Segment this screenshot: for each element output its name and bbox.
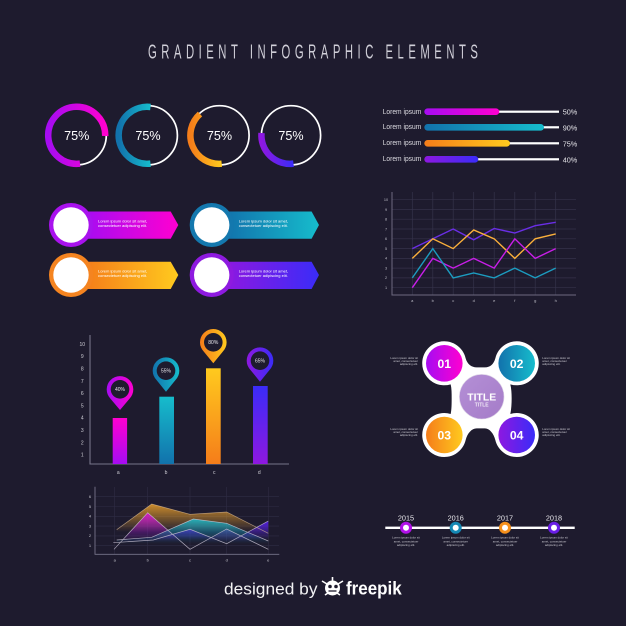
icon: freepik mascot <box>322 577 343 596</box>
bar c with 80% pin <box>200 329 227 476</box>
progress bar: 40%: Lorem ipsum <box>383 156 421 163</box>
bar chart with pins <box>80 329 289 476</box>
area: teal <box>117 519 268 549</box>
node 03 <box>426 417 463 453</box>
ribbon: magenta: Lorem ipsum dolor sit amet, <box>98 219 147 224</box>
ribbon: purple <box>190 253 319 297</box>
y axis labels: 1 <box>385 286 387 290</box>
milestone 2017 <box>491 514 519 547</box>
y axis labels: 10 <box>80 342 85 348</box>
ribbon: orange: Lorem ipsum dolor sit amet, <box>98 269 147 274</box>
bar b with 55% pin <box>153 357 179 476</box>
progress bar: 40% <box>383 155 578 164</box>
bar c with 80% pin: 80% <box>208 340 219 346</box>
ribbon: orange: consectetuer adipiscing elit. <box>98 273 147 278</box>
donut: magenta 75%: 75% <box>64 129 89 143</box>
y axis labels: 2 <box>385 276 387 280</box>
area: purple <box>113 521 268 549</box>
line: magenta <box>412 239 556 288</box>
caption: 01: amet, consectetuer <box>393 359 418 363</box>
y axis labels <box>384 198 388 290</box>
x axis labels: b <box>432 298 435 303</box>
milestone 2017: 2017 <box>497 514 513 522</box>
white blob connector <box>422 341 539 457</box>
area chart <box>89 487 279 562</box>
caption: 02: amet, consectetuer <box>542 359 567 363</box>
milestone 2016: amet, consectetuer <box>443 539 468 543</box>
caption: 02: Lorem ipsum dolor sit <box>542 356 570 360</box>
progress bar: 90%: 90% <box>563 123 578 132</box>
centre circle: TITLE <box>475 403 489 409</box>
x axis labels: d <box>473 298 475 303</box>
x axis labels: a <box>114 558 117 562</box>
node 04: 04 <box>510 428 524 442</box>
y axis labels: 2 <box>81 440 84 446</box>
caption: 04: Lorem ipsum dolor sit <box>542 427 570 431</box>
milestone 2016 <box>442 514 470 547</box>
y axis labels: 3 <box>81 428 84 434</box>
panel: horizontal progress bars <box>383 108 578 164</box>
y axis labels: 9 <box>385 208 387 212</box>
panel: numbered cluster diagram <box>390 341 570 457</box>
bar c with 80% pin: c <box>213 470 216 476</box>
progress bar: 90%: Lorem ipsum <box>383 124 421 131</box>
ribbon: magenta: consectetuer adipiscing elit. <box>98 223 147 228</box>
x axis labels <box>114 558 270 562</box>
bar d with 65% pin <box>247 347 273 476</box>
node 04 <box>498 417 535 453</box>
progress bar: 40%: 40% <box>563 155 578 164</box>
panel: ribbon labels <box>49 203 319 297</box>
milestone 2015 <box>392 514 420 547</box>
ribbon: teal: consectetuer adipiscing elit. <box>239 223 288 228</box>
ribbon: teal: Lorem ipsum dolor sit amet, <box>239 219 288 224</box>
line chart <box>384 192 576 303</box>
area: orange <box>117 504 268 548</box>
x axis labels: e <box>493 298 496 303</box>
milestone 2017: Lorem ipsum dolor sit <box>491 536 519 540</box>
ribbon: purple: Lorem ipsum dolor sit amet, <box>239 269 288 274</box>
y axis labels: 5 <box>81 403 84 409</box>
y axis labels: 6 <box>385 237 387 241</box>
donut: orange 75%: 75% <box>207 129 232 143</box>
donut: purple 75% <box>261 106 321 165</box>
node 01: 01 <box>438 357 451 371</box>
caption: 04: adipiscing elit. <box>542 433 561 437</box>
progress bar: 75% <box>383 139 578 148</box>
progress bar: 75%: Lorem ipsum <box>383 140 421 147</box>
bar b with 55% pin: b <box>165 470 168 476</box>
progress bar: 50%: Lorem ipsum <box>383 109 421 116</box>
milestone 2015: amet, consectetuer <box>394 539 418 543</box>
caption: 01: adipiscing elit. <box>400 362 418 366</box>
y axis labels: 3 <box>385 266 387 270</box>
donut: purple 75%: 75% <box>278 129 304 143</box>
y axis labels <box>89 494 92 548</box>
caption: 01: Lorem ipsum dolor sit <box>390 356 418 360</box>
node 02 <box>498 345 535 382</box>
progress bar: 75%: 75% <box>563 139 578 148</box>
x axis labels: c <box>189 558 191 562</box>
x axis labels: b <box>147 558 150 562</box>
progress bar: 50%: 50% <box>563 108 578 117</box>
milestone 2018: amet, consectetuer <box>542 539 566 543</box>
x axis labels: h <box>555 298 557 303</box>
y axis labels: 4 <box>81 416 84 422</box>
caption: 02: adipiscing elit. <box>542 362 561 366</box>
line: teal <box>412 249 556 278</box>
y axis labels: 1 <box>81 453 84 459</box>
ribbon: orange <box>49 253 178 297</box>
ribbon: magenta <box>49 203 178 247</box>
bar d with 65% pin: 65% <box>255 358 266 364</box>
ribbon: teal <box>190 203 319 247</box>
y axis labels: 6 <box>89 494 92 499</box>
y axis labels: 10 <box>384 198 388 202</box>
title: GRADIENT INFOGRAPHIC ELEMENTS <box>148 40 478 63</box>
caption: 04: amet, consectetuer <box>542 430 567 434</box>
y axis labels: 1 <box>89 543 92 548</box>
line: purple <box>412 222 556 249</box>
y axis labels: 8 <box>385 218 387 222</box>
y axis labels: 9 <box>81 354 84 360</box>
donut: teal 75%: 75% <box>135 129 161 143</box>
donut: magenta 75% <box>47 106 106 165</box>
area: magenta <box>114 513 268 549</box>
milestone 2016: 2016 <box>448 514 464 522</box>
bar a with 40% pin: 40% <box>115 387 126 393</box>
footer: designed by freepik: designed by <box>224 580 318 598</box>
progress bar: 50% <box>383 108 578 117</box>
timeline <box>385 514 575 547</box>
caption: 03: amet, consectetuer <box>393 430 418 434</box>
node 01 <box>426 345 463 382</box>
progress bar: 90% <box>383 123 578 132</box>
milestone 2015: Lorem ipsum dolor sit <box>392 536 420 540</box>
y axis labels: 7 <box>81 379 84 385</box>
bar a with 40% pin: a <box>117 470 120 476</box>
y axis labels: 2 <box>89 533 92 538</box>
ribbon: purple: consectetuer adipiscing elit. <box>239 273 288 278</box>
node 02: 02 <box>510 357 524 371</box>
bar a with 40% pin <box>107 376 133 476</box>
node 03: 03 <box>438 428 451 442</box>
x axis labels: g <box>534 298 536 303</box>
donut: orange 75% <box>190 106 249 165</box>
y axis labels: 6 <box>81 391 84 397</box>
milestone 2015: 2015 <box>398 514 414 522</box>
y axis labels: 5 <box>89 504 92 509</box>
y axis labels: 3 <box>89 523 92 528</box>
milestone 2018 <box>540 514 568 547</box>
x axis labels: d <box>226 558 228 562</box>
milestone 2018: Lorem ipsum dolor sit <box>540 536 568 540</box>
chart outlines <box>113 504 268 549</box>
y axis labels: 4 <box>89 514 92 519</box>
milestone 2018: 2018 <box>546 514 562 522</box>
y axis labels: 5 <box>385 247 387 251</box>
bar b with 55% pin: 55% <box>161 368 172 374</box>
centre circle: TITLE <box>467 392 496 404</box>
donut: teal 75% <box>118 106 177 165</box>
milestone 2017: amet, consectetuer <box>493 539 517 543</box>
x axis labels: a <box>411 298 414 303</box>
panel: progress donuts <box>47 106 321 165</box>
caption: 03: Lorem ipsum dolor sit <box>390 427 418 431</box>
footer: designed by freepik <box>224 577 403 598</box>
milestone 2016: Lorem ipsum dolor sit <box>442 536 470 540</box>
y axis labels: 8 <box>81 366 84 372</box>
milestone 2015: adipiscing elit. <box>397 543 415 547</box>
y axis labels: 4 <box>385 257 387 261</box>
y axis labels <box>80 342 85 459</box>
milestone 2017: adipiscing elit. <box>496 543 514 547</box>
caption: 03: adipiscing elit. <box>400 433 418 437</box>
x axis labels: c <box>452 298 454 303</box>
line: orange <box>412 230 556 258</box>
x axis labels: e <box>267 558 270 562</box>
milestone 2018: adipiscing elit. <box>545 543 563 547</box>
footer: designed by freepik: freepik <box>346 578 403 598</box>
centre circle <box>459 374 504 419</box>
x axis labels: f <box>514 298 516 303</box>
milestone 2016: adipiscing elit. <box>447 543 465 547</box>
x axis labels <box>411 298 557 303</box>
y axis labels: 7 <box>385 227 387 231</box>
bar d with 65% pin: d <box>258 470 261 476</box>
